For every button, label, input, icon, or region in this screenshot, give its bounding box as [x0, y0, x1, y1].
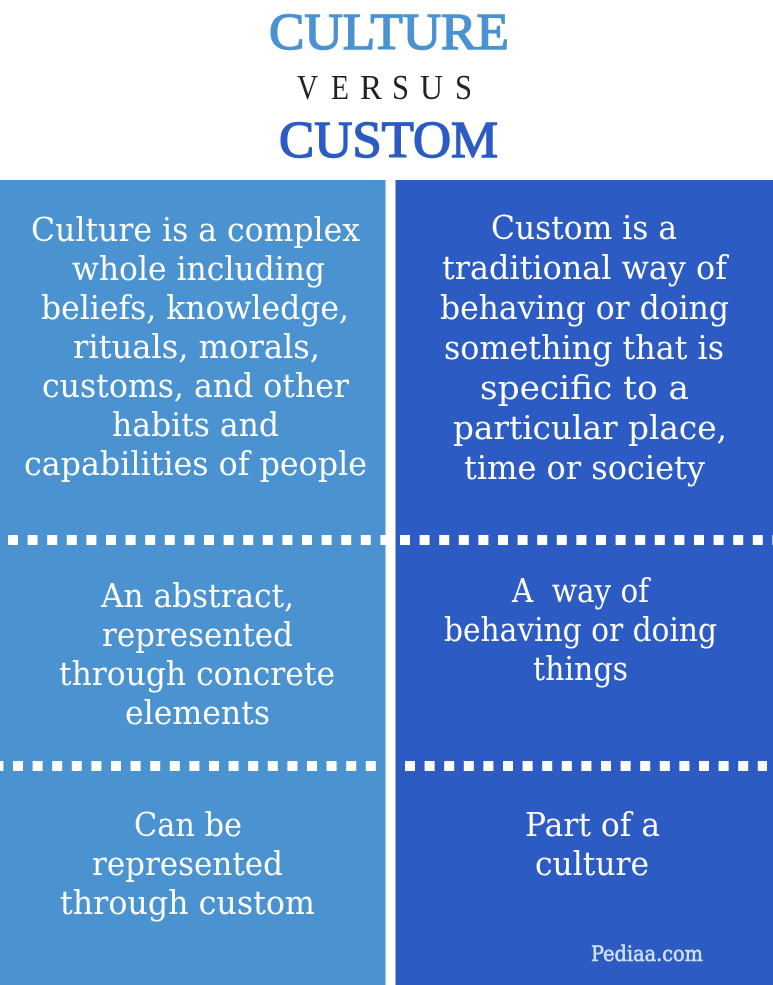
text: culture definition: beliefs, knowledge, [41, 289, 349, 327]
title [269, 4, 509, 169]
text: custom definition: traditional way of [442, 249, 729, 287]
text: culture definition: habits and [112, 406, 279, 444]
text: custom nature [444, 572, 717, 688]
text: culture nature: elements [125, 694, 270, 732]
text: custom relation [525, 806, 660, 883]
text: culture relation: represented [92, 845, 283, 883]
heading: versus: R [360, 68, 383, 107]
text: culture nature: through concrete [59, 655, 335, 693]
text: custom definition: something that is [444, 329, 724, 367]
heading: versus: S [455, 68, 472, 107]
text: custom definition [440, 209, 729, 487]
text: custom relation: Part of a [525, 806, 660, 844]
text: custom nature: behaving or doing [444, 611, 717, 649]
text: custom definition: specific to a [480, 369, 689, 407]
text: culture definition: rituals, morals, [73, 328, 320, 366]
text: custom definition: time or society [464, 449, 706, 487]
heading: versus: S [392, 68, 409, 107]
text: culture definition [24, 211, 367, 483]
text: culture relation [60, 806, 315, 922]
text: culture relation: through custom [60, 884, 315, 922]
heading: versus: U [420, 68, 443, 107]
text: culture definition: customs, and other [42, 367, 349, 405]
heading: versus [297, 68, 472, 107]
panel: culture column [0, 180, 386, 985]
text: culture relation: Can be [134, 806, 242, 844]
divider row 2 left [0, 761, 376, 771]
heading: custom: CUSTOM [279, 112, 498, 169]
logo: Pediaa.com: Pediaa.com [591, 942, 703, 966]
divider row 2 right [405, 761, 767, 771]
panel: custom column [396, 180, 773, 985]
text: custom definition: particular place, [453, 409, 727, 447]
divider row 1 left [8, 535, 386, 545]
heading: culture: CULTURE [269, 4, 509, 61]
text: culture nature: represented [102, 616, 293, 654]
text: custom relation: culture [535, 845, 649, 883]
text: custom definition: behaving or doing [440, 289, 729, 327]
text: culture definition: Culture is a complex [31, 211, 360, 249]
heading: versus: V [297, 68, 318, 107]
text: culture nature: An abstract, [100, 577, 294, 615]
text: culture definition: whole including [72, 250, 325, 288]
heading: versus: E [331, 68, 349, 107]
text: culture definition: capabilities of people [24, 445, 367, 483]
divider row 1 right [400, 535, 773, 545]
text: custom definition: Custom is a [491, 209, 677, 247]
text: culture nature [59, 577, 335, 732]
text: custom nature: things [533, 650, 628, 688]
text: custom nature: A way of [511, 572, 651, 610]
